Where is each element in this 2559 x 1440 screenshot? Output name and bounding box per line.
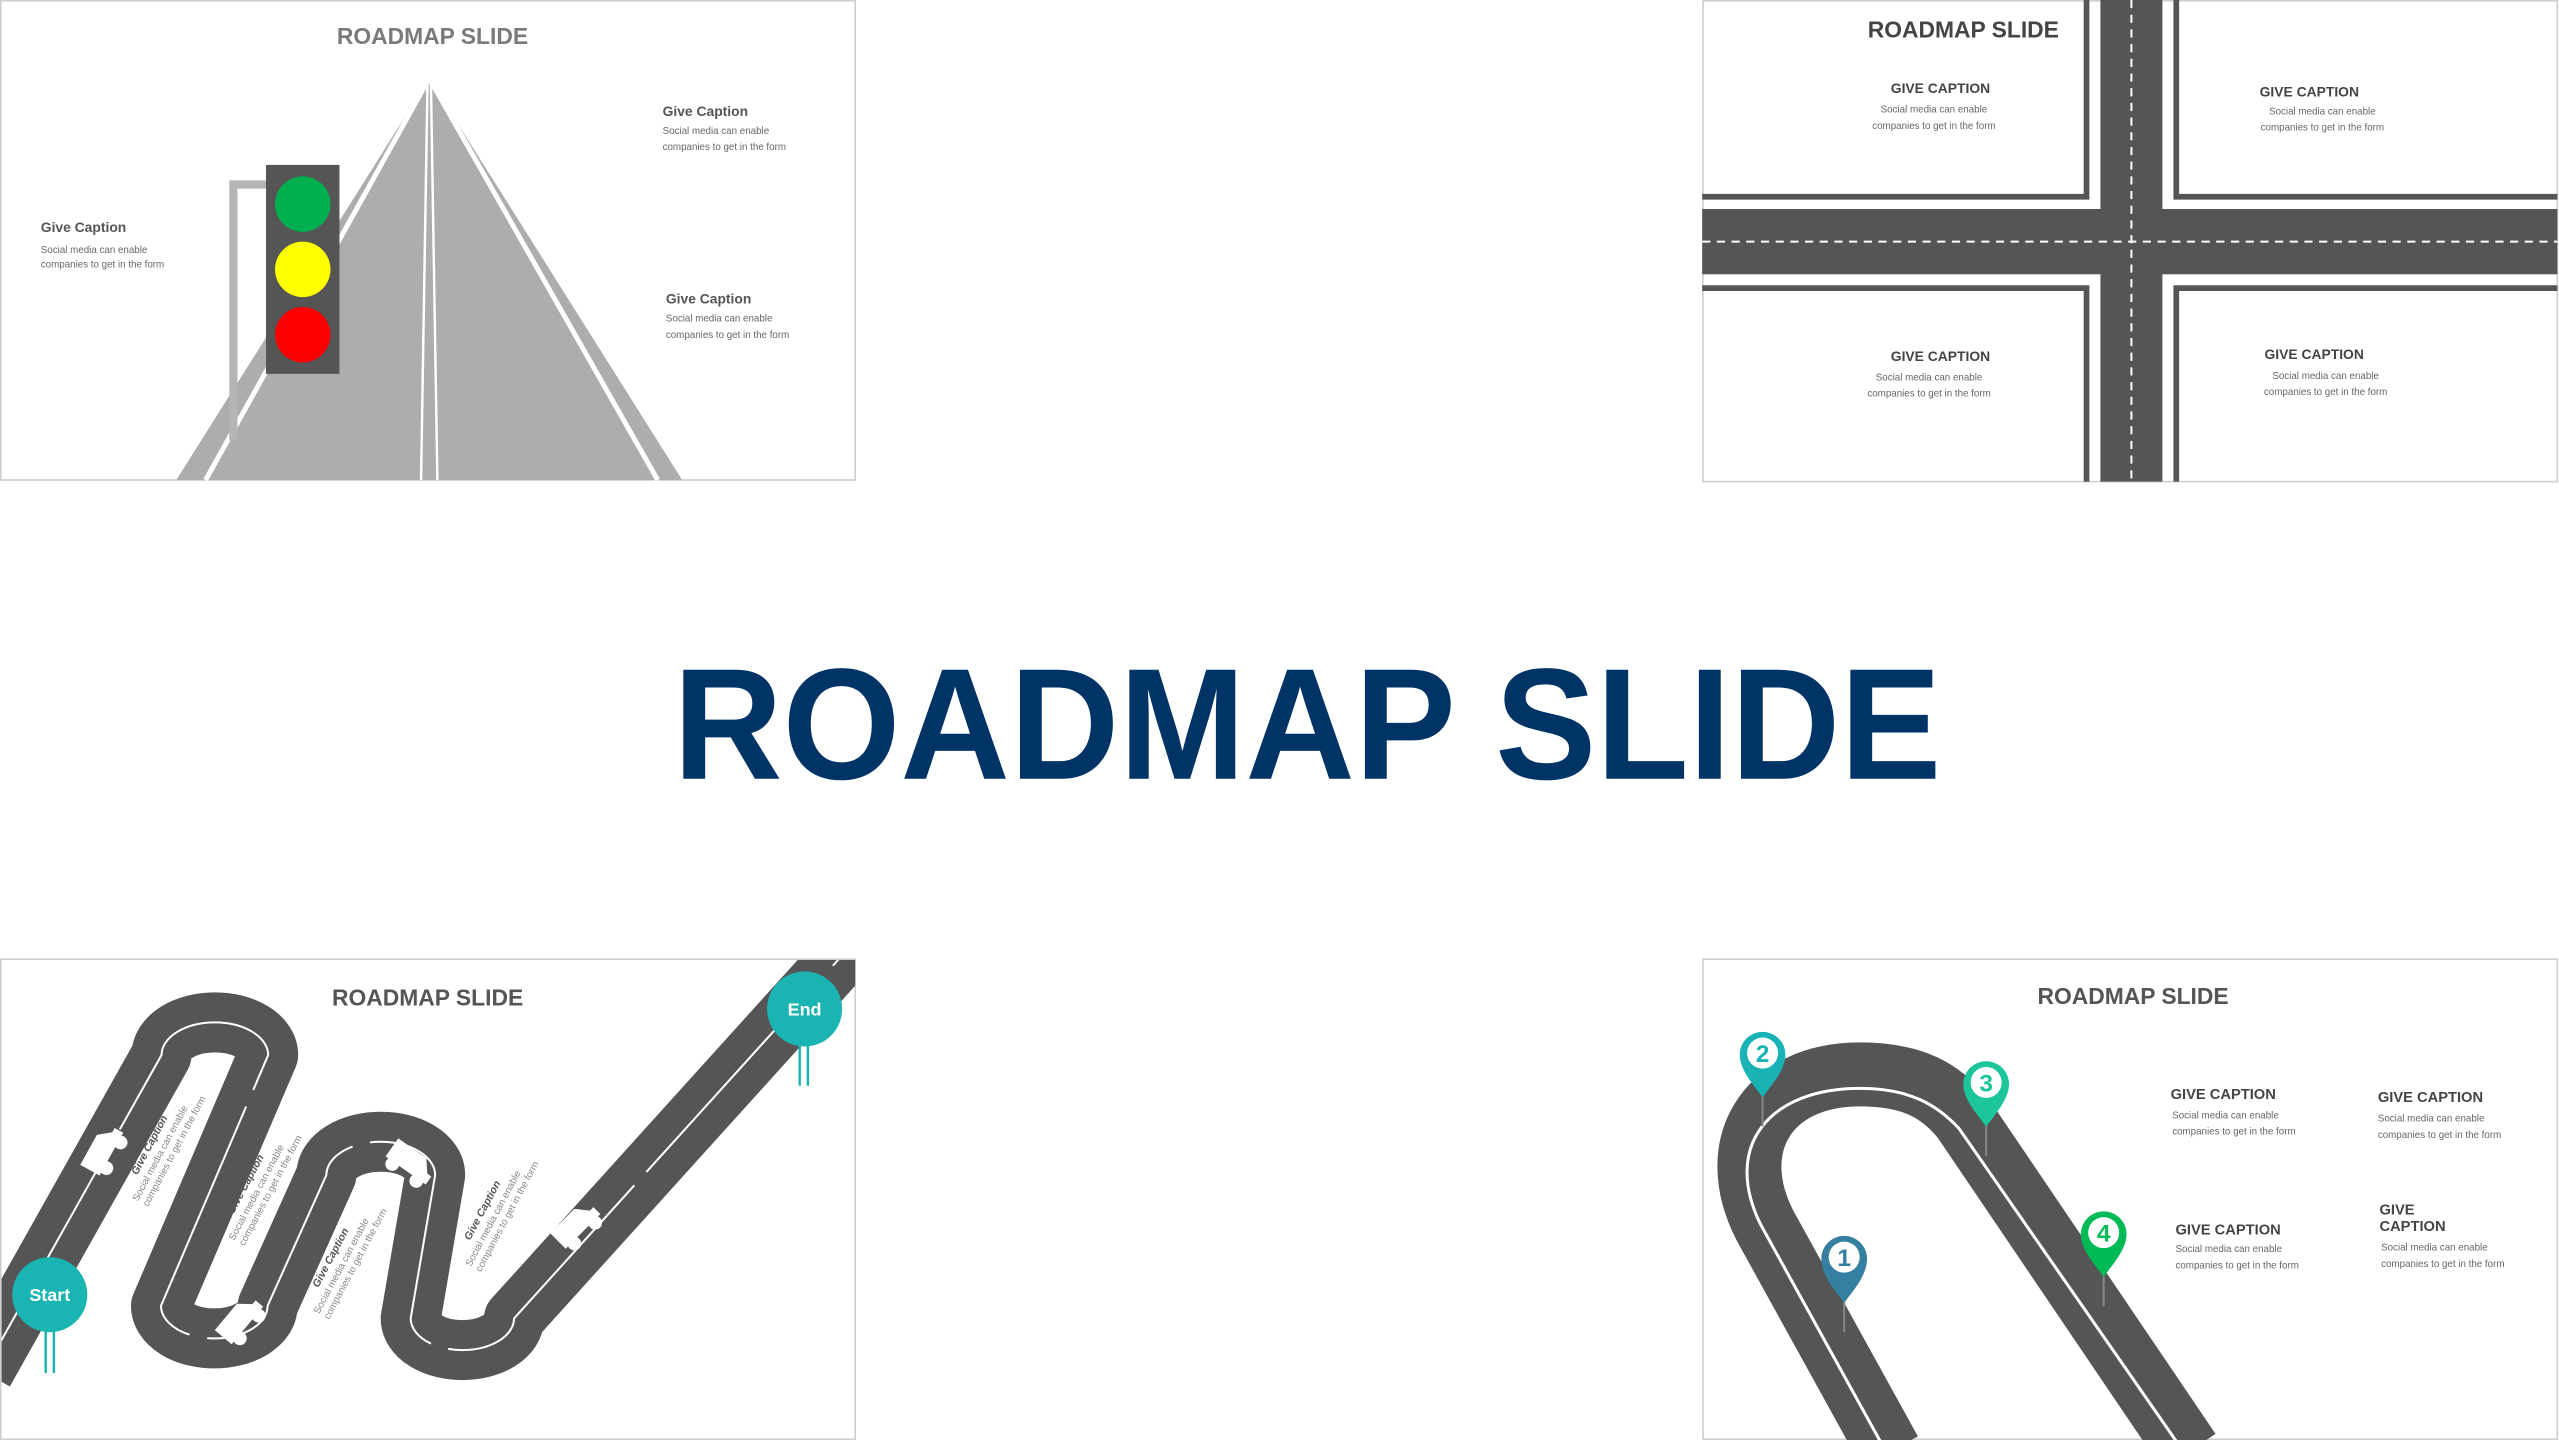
caption: hairpin 4: CAPTION: [2379, 1219, 2446, 1235]
caption: hairpin 3: Social media can enable: [2175, 1244, 2282, 1255]
heading: bottom-right: ROADMAP SLIDE: [2037, 983, 2229, 1009]
caption: BL quadrant: GIVE CAPTION: [1891, 348, 1990, 364]
caption: right top: Social media can enable: [663, 126, 769, 137]
panel: winding road slide: [0, 948, 855, 1439]
caption: winding 2: Social media can enable: [227, 1143, 287, 1242]
heading: top-right: ROADMAP SLIDE: [1868, 17, 2059, 43]
marker: start: [12, 1257, 87, 1373]
hairpin road: [1747, 1074, 2189, 1440]
caption: TL quadrant: Social media can enable: [1881, 105, 1987, 116]
panel: crossroads slide: [1702, 0, 2557, 482]
caption: BL quadrant: companies to get in the form: [1867, 389, 1991, 400]
caption: right bottom: [666, 291, 789, 341]
pin 3: 3: [1979, 1070, 1993, 1097]
panel: traffic light slide: [1, 1, 855, 480]
caption: hairpin 2: companies to get in the form: [2378, 1130, 2501, 1141]
caption: hairpin 3: companies to get in the form: [2175, 1261, 2299, 1272]
caption: right top: companies to get in the form: [663, 142, 786, 153]
main title: ROADMAP SLIDE: [673, 636, 1941, 813]
pin 3: [1963, 1061, 2009, 1156]
caption: left: [41, 219, 164, 271]
caption: right top: Give Caption: [663, 103, 748, 119]
marker: start: Start: [29, 1285, 70, 1305]
icon: cars: [80, 1122, 607, 1350]
crossroads: [1702, 0, 2557, 482]
caption: BR quadrant: [2264, 346, 2387, 398]
pin 2: 2: [1756, 1041, 1769, 1068]
caption: hairpin 2: [2378, 1090, 2501, 1141]
caption: winding 2: Give Caption: [225, 1152, 267, 1216]
caption: hairpin 3: GIVE CAPTION: [2175, 1222, 2281, 1238]
caption: hairpin 2: GIVE CAPTION: [2378, 1090, 2483, 1106]
caption: winding 1: companies to get in the form: [141, 1094, 209, 1209]
caption: hairpin 4: companies to get in the form: [2381, 1259, 2505, 1270]
caption: hairpin 3: [2175, 1222, 2299, 1272]
caption: hairpin 1: [2171, 1087, 2296, 1138]
pin 1: 1: [1837, 1245, 1851, 1272]
caption: right bottom: Give Caption: [666, 291, 751, 307]
pin 2: [1740, 1032, 1785, 1127]
caption: winding 2: companies to get in the form: [237, 1134, 305, 1248]
caption: winding 4: Give Caption: [462, 1178, 504, 1242]
caption: TR quadrant: GIVE CAPTION: [2260, 83, 2359, 99]
caption: TR quadrant: Social media can enable: [2269, 106, 2376, 117]
caption: winding 3: companies to get in the form: [322, 1207, 390, 1321]
heading: top-left: ROADMAP SLIDE: [337, 23, 528, 49]
caption: hairpin 1: Social media can enable: [2172, 1110, 2279, 1121]
caption: winding 4: [451, 1148, 541, 1274]
winding road: [0, 948, 849, 1372]
marker: end: End: [788, 1000, 822, 1020]
caption: hairpin 4: GIVE: [2379, 1203, 2415, 1219]
caption: left: Social media can enable: [41, 245, 147, 256]
caption: BL quadrant: [1867, 348, 1991, 400]
caption: winding 1: [118, 1082, 209, 1209]
caption: TL quadrant: [1872, 80, 1996, 132]
icon: traffic light: [233, 165, 339, 441]
panel: hairpin road slide: [1703, 959, 2557, 1440]
caption: BL quadrant: Social media can enable: [1876, 372, 1982, 383]
marker: end: [767, 971, 842, 1086]
caption: winding 1: Social media can enable: [131, 1104, 191, 1203]
caption: right bottom: companies to get in the form: [666, 330, 789, 341]
caption: TL quadrant: companies to get in the form: [1872, 121, 1996, 132]
caption: winding 3: Social media can enable: [312, 1217, 372, 1316]
caption: winding 4: companies to get in the form: [474, 1160, 541, 1274]
caption: winding 3: [300, 1195, 390, 1321]
caption: left: Give Caption: [41, 219, 126, 235]
caption: left: companies to get in the form: [41, 260, 164, 271]
caption: BR quadrant: Social media can enable: [2272, 371, 2379, 382]
caption: TR quadrant: [2260, 83, 2384, 134]
road: perspective: [176, 78, 682, 480]
caption: hairpin 2: Social media can enable: [2378, 1114, 2484, 1125]
caption: winding 4: Social media can enable: [464, 1169, 523, 1269]
pin 1: [1821, 1236, 1867, 1332]
caption: hairpin 1: companies to get in the form: [2172, 1127, 2296, 1138]
pin 4: [2081, 1211, 2127, 1306]
caption: hairpin 4: Social media can enable: [2381, 1243, 2488, 1254]
caption: winding 1: Give Caption: [129, 1113, 171, 1177]
caption: TL quadrant: GIVE CAPTION: [1891, 80, 1990, 96]
caption: hairpin 4: [2379, 1203, 2505, 1270]
caption: TR quadrant: companies to get in the form: [2261, 123, 2384, 134]
heading: bottom-left: ROADMAP SLIDE: [332, 985, 523, 1011]
caption: hairpin 1: GIVE CAPTION: [2171, 1087, 2276, 1103]
caption: right top: [663, 103, 786, 153]
pin 4: 4: [2097, 1221, 2111, 1248]
caption: right bottom: Social media can enable: [666, 314, 772, 325]
caption: winding 2: [215, 1122, 305, 1248]
caption: BR quadrant: GIVE CAPTION: [2265, 346, 2364, 362]
caption: BR quadrant: companies to get in the form: [2264, 387, 2387, 398]
caption: winding 3: Give Caption: [310, 1226, 352, 1290]
